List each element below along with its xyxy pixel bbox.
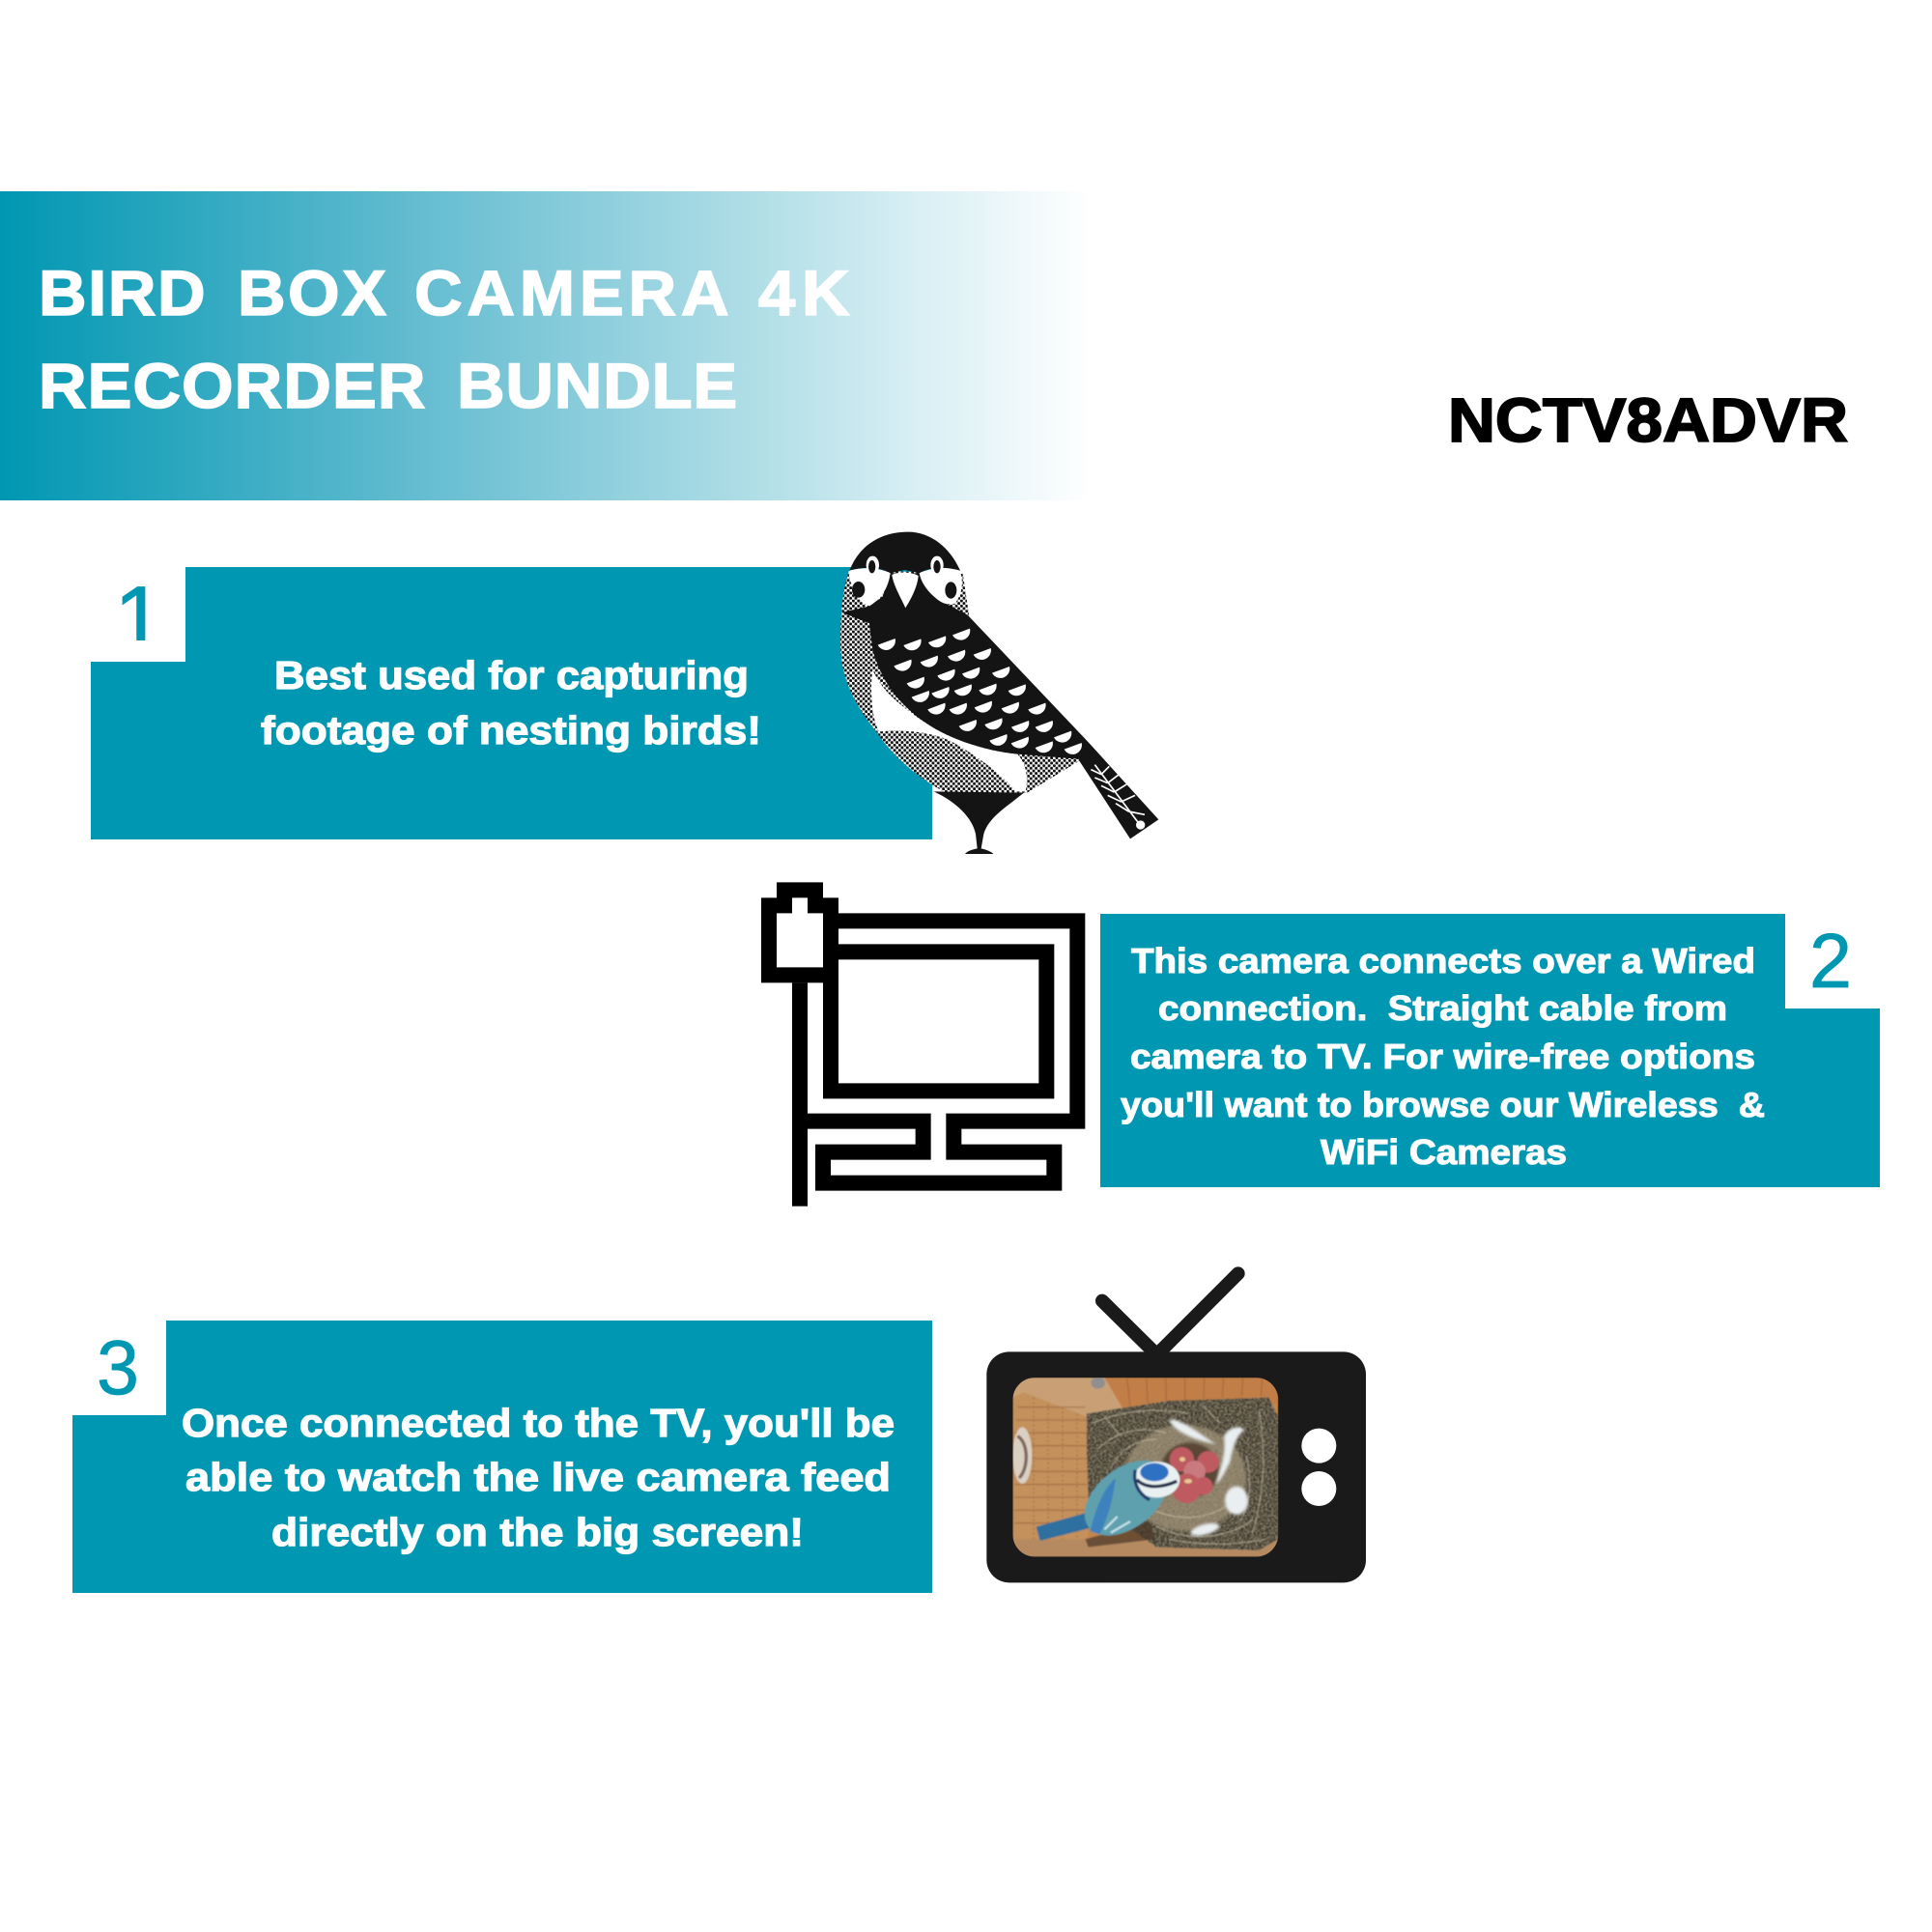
- icon: television showing nest camera feed: [986, 1273, 1366, 1582]
- title: CAMERA: [414, 258, 729, 329]
- step 2 text: connection. Straight cable from: [1158, 988, 1727, 1028]
- step 2 text: [1121, 941, 1765, 1172]
- icon: illustrated bird: [840, 532, 1158, 854]
- title: 4K: [758, 258, 850, 329]
- icon: wired monitor with network plug: [761, 882, 1085, 1207]
- step 1 text: [261, 653, 761, 753]
- step 2 text: WiFi Cameras: [1321, 1132, 1567, 1172]
- bird wing scales: [878, 629, 1082, 754]
- panel: step 2: [1100, 914, 1880, 1187]
- chicks: [1170, 1447, 1219, 1503]
- blue tit: [1036, 1460, 1180, 1548]
- step 2 text: camera to TV. For wire-free options: [1130, 1037, 1755, 1076]
- step 1 text: footage of nesting birds!: [261, 708, 761, 753]
- title: BIRD: [39, 258, 206, 329]
- title: [39, 258, 850, 422]
- panel: step 1: [91, 567, 932, 839]
- step 3 text: directly on the big screen!: [271, 1510, 804, 1554]
- tv antenna: [1102, 1273, 1238, 1354]
- step number 3: 3: [97, 1324, 139, 1410]
- infographic canvas: [0, 191, 1880, 1593]
- step 3 text: [182, 1401, 895, 1554]
- panel: step 3: [72, 1321, 932, 1593]
- nest strands: [1092, 1404, 1265, 1544]
- step 3 text: Once connected to the TV, you'll be: [182, 1401, 895, 1445]
- title: RECORDER: [39, 351, 425, 422]
- title: BUNDLE: [457, 351, 737, 422]
- step number 2: 2: [1809, 918, 1852, 1004]
- step 2 text: you'll want to browse our Wireless &: [1121, 1085, 1765, 1124]
- nest camera image: [1012, 1378, 1278, 1557]
- step 2 text: This camera connects over a Wired: [1131, 941, 1755, 980]
- tv buttons: [1301, 1429, 1336, 1506]
- step number 1: 1: [114, 567, 164, 668]
- step 1 text: Best used for capturing: [274, 653, 749, 697]
- tv body: [986, 1351, 1366, 1582]
- product code: NCTV8ADVR: [1448, 385, 1848, 455]
- title: BOX: [238, 258, 386, 329]
- nest feathers: [1169, 1419, 1248, 1538]
- step 3 text: able to watch the live camera feed: [185, 1455, 891, 1499]
- header banner: [0, 191, 1092, 500]
